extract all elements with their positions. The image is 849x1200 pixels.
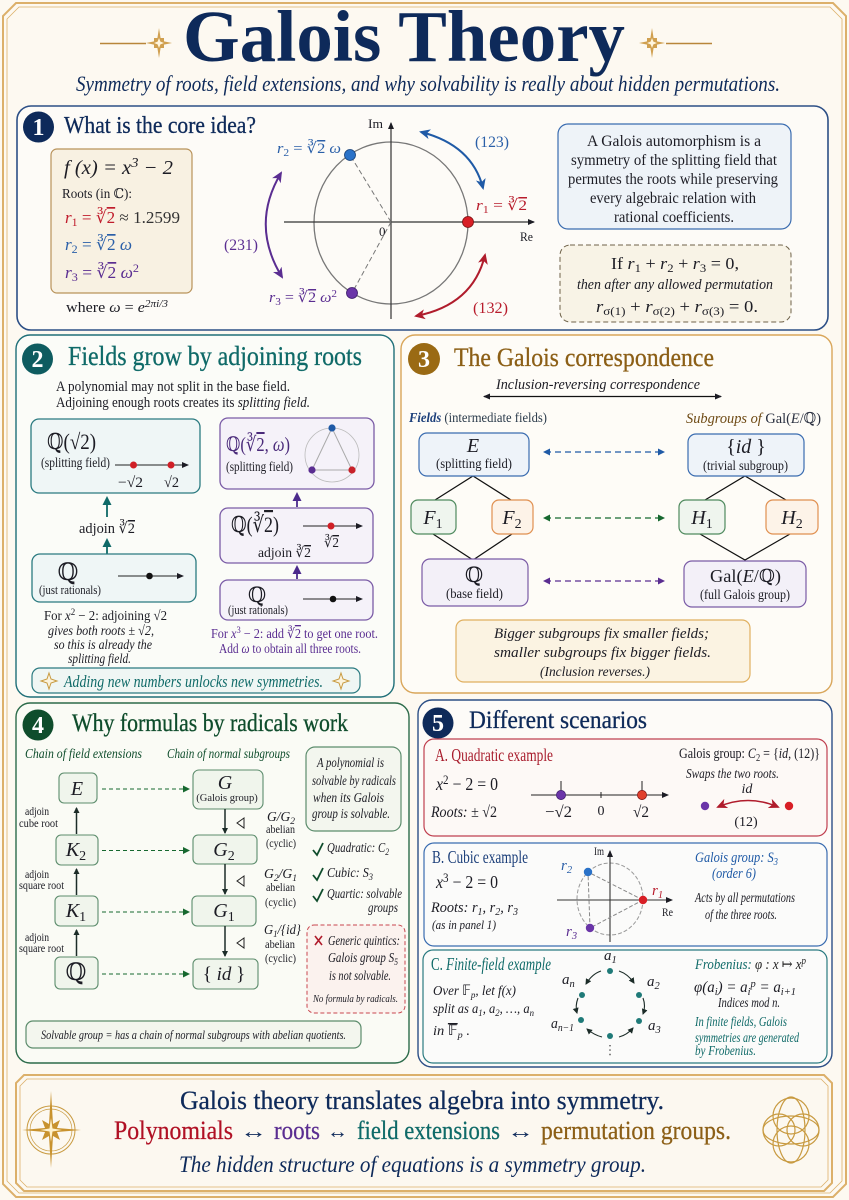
quotient labels: G/G2 (267, 810, 295, 827)
quotient labels: (cyclic) (266, 836, 296, 850)
chain of subgroups: G (218, 772, 233, 794)
diagram: roots on the circle: r3 = ∛2 ω2 (269, 288, 337, 308)
chain of subgroups: (Galois group) (196, 793, 258, 804)
footer line 2: Polynomials (114, 1116, 233, 1145)
node H1 (679, 500, 725, 534)
box: polynomial and roots: r2 = ∛2 ω (65, 234, 132, 256)
node F1 (411, 500, 456, 534)
column headers (25, 747, 290, 762)
heading 1: What is the core idea? (64, 113, 256, 139)
card B: cubic example: Roots: r1, r2, r3 (430, 900, 518, 918)
box: Q(cube root 2): ∛2 (324, 534, 339, 551)
footer line 2 (114, 1116, 731, 1145)
box: automorphism definition: permutes the roots while preserving (568, 171, 778, 188)
footer line 2: permutation groups. (541, 1116, 731, 1145)
icon: compass star (22, 1091, 81, 1168)
panel 2: fields grow (16, 335, 394, 697)
panel 1: core idea (17, 106, 828, 330)
note on x cubed minus 2: Add ω to obtain all three roots. (219, 641, 361, 656)
heading 5: Different scenarios (469, 707, 647, 734)
note: inclusion reverses (456, 620, 750, 682)
chain of subgroups: { id } (203, 964, 245, 985)
intro text (56, 379, 310, 411)
arrows and adjoin label: adjoin ∛2 (79, 519, 135, 537)
diagram: roots on the circle: (123) (475, 134, 509, 151)
card C: finite-field example: Frobenius: φ : x ↦ xp (694, 956, 806, 973)
footer line 2: ↔ (507, 1121, 534, 1143)
box: polynomial and roots: f (x) = x3 − 2 (64, 156, 173, 179)
box: Q(sqrt 2): −√2 (118, 475, 143, 491)
panel 4: formulas by radicals (16, 703, 409, 1063)
box: polynomial and roots (51, 149, 192, 293)
card B: cubic example: x3 − 2 = 0 (435, 871, 498, 892)
heading 3: The Galois correspondence (454, 343, 714, 372)
node id: {id } (726, 436, 766, 458)
solvable degrees checklist: groups (368, 901, 398, 916)
chain of fields: cube root (19, 818, 59, 830)
diagram: roots on the circle: r1 = ∛ 2 (476, 196, 527, 216)
badge 4: 4 (32, 713, 44, 739)
chain of fields: K1 (65, 900, 86, 925)
card C: finite-field example: by Frobenius. (695, 1043, 756, 1058)
box: Q(cube root 2) (220, 508, 373, 563)
card B: cubic example: (as in panel 1) (432, 917, 496, 932)
card C: finite-field example: a3 (648, 1018, 661, 1036)
badge 1: 1 (32, 115, 44, 141)
box: permutation preserves relation: If r1 + r2 + r3 = 0, (611, 254, 739, 275)
quotient labels: abelian (266, 880, 295, 894)
badge 3 (408, 343, 440, 375)
note on x squared minus 2: so this is already the (54, 638, 152, 653)
quotient labels: (cyclic) (265, 895, 296, 909)
solvable degrees checklist: Quartic: solvable (327, 887, 402, 902)
box: definition of solvable group: Solvable group = has a chain of normal subgroups with abelian quotients. (41, 1027, 346, 1042)
quotient labels: G2/G1 (264, 867, 297, 884)
box: permutation preserves relation: rσ(1) + rσ(2) + rσ(3) = 0. (596, 297, 758, 318)
card B: cubic example: r1 (652, 883, 663, 901)
chain of fields (19, 773, 98, 989)
card B: cubic example: of the three roots. (705, 908, 777, 923)
box: Q(sqrt 2): (splitting field) (41, 455, 110, 470)
card A: quadratic example: (12) (734, 815, 758, 830)
card A: quadratic example: −√2 (545, 804, 572, 821)
card C: finite-field example: split as a1, a2, …, an (433, 1002, 534, 1019)
card C: finite-field example: an (562, 972, 575, 990)
card C: finite-field example: in 𝔽p . (433, 1024, 470, 1041)
quotient labels: abelian (265, 937, 295, 951)
footer line 2: field extensions (357, 1116, 500, 1145)
badge 1 (23, 112, 54, 142)
column header: fields: Fields (intermediate fields) (408, 411, 547, 426)
arrows and adjoin label (79, 499, 135, 555)
chain of fields: adjoin (25, 932, 49, 944)
note on x cubed minus 2: For x3 − 2: add ∛2 to get one root. (211, 625, 378, 641)
icon: knot of rings (763, 1097, 819, 1163)
card B: cubic example: B. Cubic example (432, 847, 528, 867)
footer line 2: roots (274, 1116, 320, 1145)
intro text: A polynomial may not split in the base field. (56, 379, 290, 395)
correspondence arrows (545, 452, 663, 581)
card C: finite-field example: φ(ai) = aip = ai+1 (694, 978, 796, 998)
node Gal: (full Galois group) (700, 588, 790, 603)
box: solvable by radicals (306, 747, 401, 831)
box: Q(sqrt 2) (31, 419, 200, 493)
footer line 2: ↔ (240, 1121, 267, 1143)
node id: (trivial subgroup) (703, 459, 788, 474)
intro text: Adjoining enough roots creates its splitting field. (56, 395, 310, 411)
box: Q just rationals: ℚ (58, 560, 78, 586)
badge 5 (422, 708, 454, 738)
box: Q just rationals: (just rationals) (39, 582, 101, 597)
card A: quadratic example: Roots: ± √2 (430, 804, 497, 821)
solvable degrees checklist: Quadratic: C2 (327, 841, 389, 858)
note: inclusion reverses: smaller subgroups fix bigger fields. (494, 645, 711, 661)
node F2 (492, 500, 533, 534)
omega definition: where ω = e2πi/3 (66, 299, 168, 316)
solvable degrees checklist: Cubic: S3 (327, 866, 373, 883)
quotient labels: (cyclic) (265, 951, 296, 965)
node Q (422, 559, 528, 606)
chain of subgroups: G1 (213, 900, 235, 925)
note on x squared minus 2: gives both roots ± √2, (48, 624, 154, 639)
node Q: (base field) (446, 587, 503, 602)
note: inclusion reverses: Bigger subgroups fix smaller fields; (494, 626, 709, 642)
heading 2: Fields grow by adjoining roots (68, 341, 362, 371)
box: generic quintics: Generic quintics: (328, 934, 400, 949)
column headers: Chain of field extensions (25, 747, 142, 762)
card C: finite-field example: a1 (604, 948, 617, 966)
box: solvable by radicals: when its Galois (313, 791, 384, 806)
callout: new symmetries: Adding new numbers unlocks new symmetries. (63, 672, 323, 691)
note on x cubed minus 2 (211, 625, 378, 656)
panel 5: different scenarios (418, 700, 832, 1067)
node F2: F2 (501, 507, 522, 532)
box: Q just rationals (32, 554, 196, 602)
box: solvable by radicals: solvable by radicals (312, 774, 396, 789)
card A: quadratic example: id (742, 782, 753, 797)
quotient labels (264, 810, 301, 965)
box: automorphism definition: every algebraic relation with (590, 190, 756, 207)
node Gal (684, 561, 806, 607)
node E (419, 433, 529, 476)
box: automorphism definition (558, 124, 791, 229)
map arrows (102, 789, 188, 974)
box: Q base, cubic column: ℚ (248, 583, 266, 607)
card C: finite-field example: Over 𝔽p, let f(x) (433, 984, 516, 1001)
footer line 1: Galois theory translates algebra into symmetry. (180, 1086, 664, 1115)
card B: cubic example: (order 6) (712, 866, 756, 882)
card A: quadratic example: Swaps the two roots. (686, 767, 779, 782)
box: polynomial and roots: r1 = ∛2 ≈ 1.2599 (65, 207, 180, 229)
note on x squared minus 2: splitting field. (68, 652, 131, 667)
card C: finite-field example: an−1 (551, 1016, 574, 1034)
box: Q(cube root 2): ℚ(∛2) (231, 511, 279, 537)
badge 4 (22, 710, 54, 740)
chain of fields: adjoin (25, 806, 49, 818)
card A: quadratic example (424, 739, 827, 836)
card B: cubic example: Galois group: S3 (695, 850, 778, 868)
footer line 2: ↔ (327, 1121, 348, 1143)
box: generic quintics (307, 925, 405, 1013)
chain of fields: ℚ (66, 960, 86, 986)
node E: E (466, 435, 479, 457)
box: polynomial and roots: Roots (in ℂ): (62, 186, 132, 201)
callout: new symmetries (32, 668, 360, 693)
footer banner (16, 1075, 832, 1191)
column headers: Chain of normal subgroups (167, 747, 290, 762)
chain of fields: square root (19, 880, 65, 892)
diagram: roots on the circle: r2 = ∛2 ω (277, 139, 341, 159)
box: Q(cube root 2): adjoin ∛2 (258, 544, 311, 561)
badge 5: 5 (432, 711, 444, 737)
box: permutation preserves relation: then after any allowed permutation (577, 277, 773, 293)
box: generic quintics: Galois group S5 (328, 951, 398, 968)
box: splitting field of cubic: (splitting field) (226, 459, 293, 474)
solvable degrees checklist (313, 841, 402, 916)
arrow up to splitting field (296, 495, 298, 507)
card B: cubic example: r3 (566, 924, 577, 942)
node id (688, 434, 804, 476)
card B: cubic example: Im (594, 846, 604, 858)
card A: quadratic example: √2 (633, 804, 649, 821)
diagram: roots on the circle: (132) (473, 300, 508, 317)
card A: quadratic example: 0 (598, 804, 604, 819)
card B: cubic example (424, 843, 827, 946)
node Gal: Gal(E/ℚ) (710, 566, 781, 587)
card A: quadratic example: Galois group: C2 = {id, (12)} (679, 746, 820, 764)
chain of subgroups: G2 (213, 839, 235, 864)
card C: finite-field example: a2 (647, 974, 660, 992)
quotient labels: abelian (266, 822, 295, 836)
arrow up to Q(cube root 2) (296, 568, 298, 579)
chain of fields: E (70, 778, 83, 800)
column header: subgroups: Subgroups of Gal(E/ℚ) (686, 411, 821, 427)
heading 4: Why formulas by radicals work (72, 710, 348, 737)
card A: quadratic example: A. Quadratic example (435, 745, 553, 765)
chain of fields: adjoin (25, 869, 49, 881)
box: permutation preserves relation (560, 245, 791, 322)
note: inclusion reverses: (Inclusion reverses.) (540, 665, 650, 680)
box: automorphism definition: rational coefficients. (614, 209, 734, 226)
node H2 (766, 500, 818, 534)
footer line 3: The hidden structure of equations is a symmetry group. (179, 1152, 646, 1177)
diagram: roots on the circle (224, 116, 534, 319)
diagram: roots on the circle: (231) (224, 237, 258, 254)
node H2: H2 (780, 507, 803, 532)
box: splitting field of cubic (220, 418, 374, 489)
chain of subgroups (192, 770, 263, 989)
box: splitting field of cubic: ℚ(∛2, ω) (226, 432, 290, 456)
ornament: left star and line (100, 28, 172, 58)
box: definition of solvable group (26, 1021, 361, 1048)
box: Q(sqrt 2): √2 (164, 475, 179, 491)
node H1: H1 (690, 507, 713, 532)
node F1: F1 (422, 507, 443, 532)
node E: (splitting field) (436, 457, 512, 472)
card C: finite-field example (423, 948, 827, 1063)
card C: finite-field example: symmetries are generated (695, 1030, 799, 1045)
card B: cubic example: Acts by all permutations (694, 891, 795, 906)
card A: quadratic example: x2 − 2 = 0 (435, 773, 498, 794)
lattice lines (433, 476, 790, 560)
panel 3: Galois correspondence (401, 335, 832, 693)
box: solvable by radicals: group is solvable. (312, 807, 390, 822)
card C: finite-field example: In finite fields, Galois (694, 1014, 787, 1029)
badge 2: 2 (32, 347, 44, 373)
chain of fields: square root (19, 943, 65, 955)
box: Q base, cubic column: (just rationals) (228, 603, 288, 617)
node Q: ℚ (465, 563, 483, 587)
diagram: roots on the circle: Im (368, 116, 383, 131)
card C: finite-field example: C. Finite-field example (431, 954, 551, 974)
box: generic quintics: is not solvable. (329, 969, 391, 984)
quotient labels: G1/{id} (264, 923, 301, 940)
card B: cubic example: Re (662, 907, 673, 919)
chain of fields: K2 (65, 839, 86, 864)
note on x squared minus 2: For x2 − 2: adjoining √2 (44, 607, 167, 624)
ornament: right star and line (639, 28, 712, 58)
double arrow caption: Inclusion-reversing correspondence (495, 377, 700, 393)
note on x squared minus 2 (44, 607, 167, 667)
box: generic quintics: No formula by radicals. (312, 993, 398, 1005)
box: solvable by radicals: A polynomial is (316, 756, 384, 771)
box: automorphism definition: A Galois automorphism is a (587, 133, 761, 150)
diagram: roots on the circle: Re (520, 229, 533, 244)
card B: cubic example: r2 (561, 858, 573, 876)
badge 2 (22, 344, 53, 374)
card C: finite-field example: Indices mod n. (717, 995, 780, 1010)
box: automorphism definition: symmetry of the splitting field that (571, 152, 778, 169)
box: Q(sqrt 2): ℚ(√2) (47, 429, 96, 454)
box: Q base, cubic column (220, 580, 373, 620)
badge 3: 3 (418, 347, 430, 373)
box: polynomial and roots: r3 = ∛2 ω2 (65, 261, 139, 284)
diagram: roots on the circle: 0 (379, 224, 386, 239)
